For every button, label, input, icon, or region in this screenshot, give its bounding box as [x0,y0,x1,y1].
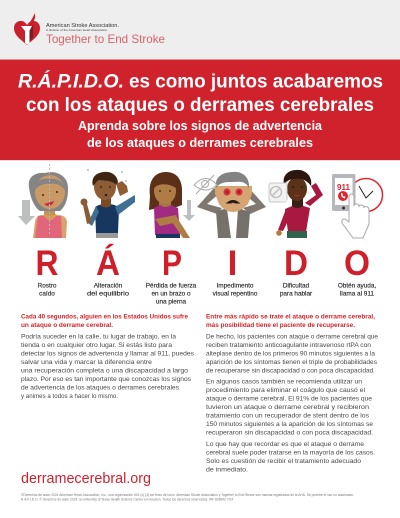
label: Impedimento visual repentino [213,282,258,298]
illustration: phone, clock and hand calling 911 [332,174,382,238]
right paragraph 3: cerebral suele poder tratarse en la mayoría de los casos. [206,450,375,456]
label: Pérdida de fuerza en un brazo o una pierna [146,282,197,306]
legal footer: ©Derechos de autor 2024 American Heart Association, Inc., una organización 501 (c) (3) sin fines de lucro. American Stroke Association y Together to End Stroke son marcas registradas de la AHA. Se prohíbe el uso no autorizado. [21,493,354,497]
label: Pérdida de fuerza en un brazo o una pierna: una pierna [156,298,187,306]
right paragraph 1: De hecho, los pacientes con ataque o derrame cerebral que [206,334,379,340]
illustration: drooping face [18,164,68,238]
label: Obtén ayuda, llama al 911: llama al 911 [340,290,374,298]
label: Rostro caído: Rostro [38,282,57,290]
left body paragraph: detectar los signos de advertencia y llamar al 911, puedes [21,350,194,358]
right heading: Entre más rápido se trate el ataque o derrame cerebral, [206,314,375,320]
label: Obtén ayuda, llama al 911: Obtén ayuda, [338,282,376,290]
right paragraph 2: ataque o derrame cerebral. El 91% de los pacientes que [206,396,373,402]
right paragraph 2: tuvieron un ataque o derrame cerebral y recibieron [206,404,370,411]
right paragraph 1: alteplase dentro de los primeros 90 minutos siguientes a la [206,350,376,358]
right paragraph 3: Solo es cuestión de recibir el tratamiento adecuado [206,458,362,465]
left body paragraph: Podría suceder en la calle, tu lugar de trabajo, en la [21,334,177,340]
logo: Together to End Stroke: Together to End Stroke [46,32,165,46]
left column text [21,314,194,400]
label: Pérdida de fuerza en un brazo o una pierna: en un brazo o [151,290,191,298]
left body paragraph: y animes a todos a hacer lo mismo. [21,393,118,400]
right heading: más posibilidad tiene el paciente de recuperarse. [206,322,355,329]
left body paragraph: plazo. Por eso es tan importante que conozcas los signos [21,376,191,383]
letter Á: Á [96,243,120,283]
left heading: un ataque o derrame cerebral. [21,322,113,329]
legal footer [21,493,354,502]
right paragraph 2: En algunos casos también se recomienda utilizar un [206,378,363,386]
left body paragraph [21,334,194,400]
letter R: R [36,244,58,283]
right paragraph 1: de recuperarse sin discapacidad o con poca discapacidad. [206,368,375,374]
title [18,70,383,116]
letter P: P [162,244,182,283]
website URL: derramecerebral.org [21,470,151,487]
left heading [21,314,188,329]
right paragraph 3: Lo que hay que recordar es que el ataque o derrame [206,441,365,448]
right paragraph 2: recuperaron sin discapacidad o con poca discapacidad. [206,430,373,436]
right paragraph 1 [206,334,379,374]
icon: clock [350,178,382,212]
label: Rostro caído: caído [39,290,55,298]
label: Alteración del equilibrio [87,282,130,298]
logo: heart and torch [14,13,40,45]
logo: division line: A division of the American Heart Association. [46,28,108,32]
left heading: Cada 40 segundos, alguien en los Estados Unidos sufre [21,314,188,320]
right paragraph 3: de inmediato. [206,466,248,474]
right paragraph 2 [206,378,374,436]
right paragraph 2: procedimiento para eliminar el coágulo que causó el [206,387,365,394]
right paragraph 1: aparición de los síntomas tienen el triple de probabilidades [206,359,377,366]
label: Obtén ayuda, llama al 911 [338,282,376,298]
left body paragraph: salvar una vida y marcar la diferencia entre [21,359,153,366]
right paragraph 2: 150 minutos siguientes a la aparición de los síntomas se [206,421,374,428]
label: Pérdida de fuerza en un brazo o una pierna: Pérdida de fuerza [146,282,197,290]
right paragraph 3 [206,441,375,474]
subtitle: Aprenda sobre los signos de advertencia [78,118,323,133]
letter I: I [228,244,237,283]
label: Dificultad para hablar [280,282,313,298]
logo: association name: American Stroke Association. [46,23,119,29]
label: Alteración del equilibrio: del equilibrio [87,290,130,298]
label: Rostro caído [38,282,57,298]
letter O: O [344,244,370,283]
illustration: arm weakness [149,172,195,238]
legal footer: R.Á.P.I.D.O. © Derechos de autor 2024, la University of Texas Health Science Center en Houston. Todos los derechos reservados. WF 808942 7/24 [21,498,233,502]
illustration: speech difficulty [269,170,323,238]
right paragraph 1: reciben tratamiento anticoagulante intravenoso rtPA con [206,342,372,349]
title: es como juntos acabaremos [129,72,383,92]
title: R.Á.P.I.D.O. [18,70,124,92]
right paragraph 2: tratamiento con un recuperador de stent dentro de los [206,412,369,420]
right column text [206,314,379,474]
left body paragraph: una recuperación completa o una discapacidad a largo [21,368,189,374]
label: Impedimento visual repentino: Impedimento [217,282,254,290]
illustration: sudden vision trouble [194,172,266,238]
icon: phone: 911 [337,183,351,192]
right heading [206,314,375,329]
label: Alteración del equilibrio: Alteración [94,282,123,290]
illustration: loss of balance [80,169,135,238]
letter D: D [284,244,308,283]
label: Dificultad para hablar: para hablar [280,290,313,298]
red title banner [0,60,400,160]
icon: speech bubble with prohibition sign [269,183,289,202]
icon: pointing hand [342,194,369,238]
title: con los ataques o derrames cerebrales [26,95,374,116]
left body paragraph: tienda o en cualquier otro lugar. Si estás listo para [21,342,173,349]
icon: crossed-out eye [194,175,217,194]
subtitle [78,118,323,150]
subtitle: de los ataques o derrames cerebrales [87,135,313,150]
label: Impedimento visual repentino: visual repentino [213,290,258,298]
label: Dificultad para hablar: Dificultad [283,282,310,290]
header band [0,0,400,59]
icon: gray down arrow [183,200,195,221]
icon: gray down arrow [18,200,35,225]
left body paragraph: de advertencia de los ataques o derrames cerebrales [21,384,179,392]
